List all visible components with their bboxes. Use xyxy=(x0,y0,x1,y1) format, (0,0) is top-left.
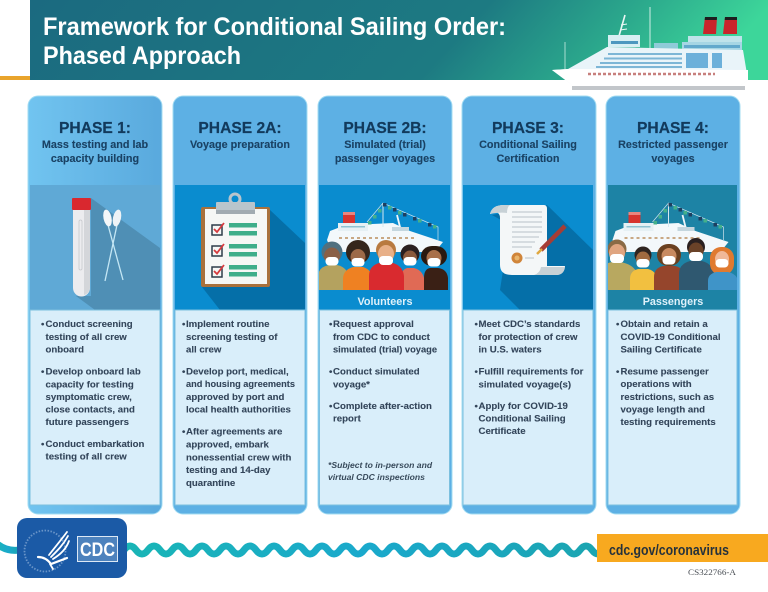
person: olive shirt xyxy=(319,242,346,290)
text panel: phase 3 actions xyxy=(463,310,593,505)
person: salmon shirt xyxy=(400,244,424,290)
url badge: cdc.gov/coronavirus xyxy=(609,543,729,559)
text panel: phase 3 actions: for protection of crew xyxy=(478,332,578,343)
illustration: volunteers and ship xyxy=(318,185,450,310)
text panel: phase 1 actions xyxy=(30,310,160,505)
text panel: phase 3 actions: in U.S. waters xyxy=(478,344,542,356)
footnote: virtual CDC inspections xyxy=(328,472,425,482)
icon: HHS eagle xyxy=(38,532,69,569)
heading: phase 4: voyages xyxy=(651,153,695,165)
text panel: phase 2B actions: simulated (trial) voyage xyxy=(333,344,438,356)
heading: phase 2A xyxy=(190,120,290,151)
heading: phase 1 xyxy=(42,120,148,165)
logo: CDC xyxy=(17,518,127,578)
text panel: phase 3 actions: • xyxy=(474,366,478,378)
text panel: phase 3 actions: Certificate xyxy=(478,426,526,437)
url badge xyxy=(597,534,768,562)
text panel: phase 3 actions: • xyxy=(474,319,478,330)
footnote: *Subject to in-person and xyxy=(328,460,433,470)
text panel: phase 4 actions: restrictions, such as xyxy=(620,392,714,403)
text panel: phase 4 actions: voyage length and xyxy=(620,404,705,416)
text panel: phase 1 actions: • xyxy=(41,366,45,378)
text panel: phase 2B actions: Complete after-action xyxy=(333,401,432,412)
heading: phase 3: PHASE 3: xyxy=(492,120,564,137)
text panel: phase 4 actions: Obtain and retain a xyxy=(620,319,708,330)
text panel: phase 4 actions: testing requirements xyxy=(620,417,716,428)
text panel: phase 2A actions: testing and 14-day xyxy=(186,465,271,476)
panel: phase 3 xyxy=(462,96,596,514)
panel: phase 2B xyxy=(318,96,452,514)
heading: phase 2A: PHASE 2A: xyxy=(198,120,282,137)
person: blue dress xyxy=(708,247,738,290)
label: volunteers: Volunteers xyxy=(358,296,412,308)
panel: phase 2A xyxy=(173,96,307,514)
illustration: passengers and ship xyxy=(601,185,738,310)
person: brown dress xyxy=(654,244,681,290)
text panel: phase 2A actions: After agreements are xyxy=(186,426,283,438)
text panel: phase 2A actions: Implement routine xyxy=(186,319,270,330)
text panel: phase 1 actions: onboard xyxy=(46,344,84,356)
person: red shirt xyxy=(369,240,404,290)
text panel: phase 2A actions: quarantine xyxy=(186,478,236,489)
heading: phase 1: capacity building xyxy=(51,153,139,165)
text panel: phase 2B actions xyxy=(320,310,450,505)
text panel: phase 3 actions: Meet CDC’s standards xyxy=(478,319,580,330)
heading: phase 3 xyxy=(479,120,577,165)
person: orange shirt xyxy=(343,240,370,290)
text panel: phase 2A actions: approved by port and xyxy=(186,392,285,403)
text panel: phase 2B actions: • xyxy=(329,319,333,330)
text panel: phase 3 actions: simulated voyage(s) xyxy=(478,380,571,390)
label: passengers: Passengers xyxy=(643,296,703,308)
illustration: test tube and swabs xyxy=(30,185,160,310)
text panel: phase 4 actions: COVID-19 Conditional xyxy=(620,332,720,343)
panel: phase 4 xyxy=(601,96,740,514)
icon: cruise ship xyxy=(552,7,748,90)
text panel: phase 2B actions: • xyxy=(329,366,333,378)
text panel: phase 3 actions: Conditional Sailing xyxy=(478,414,566,424)
text panel: phase 1 actions: testing of all crew xyxy=(46,452,127,462)
text panel: phase 2B actions: voyage* xyxy=(333,380,370,390)
text panel: phase 2B actions: report xyxy=(333,414,362,424)
heading: phase 3: Certification xyxy=(496,153,560,165)
text panel: phase 1 actions: close contacts, and xyxy=(46,404,135,416)
text panel: phase 3 actions: • xyxy=(474,401,478,412)
text panel: phase 2A actions: and housing agreements xyxy=(186,379,295,390)
text panel: phase 2A actions: local health authorities xyxy=(186,404,291,416)
heading: phase 2B: PHASE 2B: xyxy=(343,120,427,137)
text panel: phase 2B actions: • xyxy=(329,401,333,412)
text panel: phase 1 actions: Develop onboard lab xyxy=(46,366,141,378)
CDC wordmark: CDC xyxy=(80,540,115,561)
text panel: phase 2A actions: nonessential crew with xyxy=(186,452,291,464)
text panel: phase 2A actions: • xyxy=(182,366,186,378)
person: navy shirt xyxy=(679,238,714,290)
text panel: phase 1 actions: symptomatic crew, xyxy=(46,392,132,403)
heading: phase 1: PHASE 1: xyxy=(59,120,131,137)
wave divider xyxy=(0,543,604,554)
text panel: phase 2A actions: • xyxy=(182,319,186,330)
panel: phase 1 xyxy=(28,96,162,514)
text panel: phase 1 actions: capacity for testing xyxy=(46,380,134,390)
text panel: phase 2B actions: Request approval xyxy=(333,319,414,330)
text panel: phase 2A actions: Develop port, medical, xyxy=(186,366,289,378)
heading: phase 2B xyxy=(335,120,435,165)
text panel: phase 2A actions xyxy=(175,310,305,505)
text panel: phase 1 actions: Conduct embarkation xyxy=(46,439,145,450)
text panel: phase 3 actions: Apply for COVID-19 xyxy=(478,401,568,412)
heading: phase 4: Restricted passenger xyxy=(618,139,729,151)
text panel: phase 4 actions xyxy=(608,310,737,505)
heading: phase 4: PHASE 4: xyxy=(637,120,709,137)
text panel: phase 2B actions: Conduct simulated xyxy=(333,366,420,378)
text panel: phase 4 actions: Sailing Certificate xyxy=(620,344,702,356)
accent bar: orange xyxy=(0,76,30,80)
text panel: phase 2A actions: • xyxy=(182,426,186,438)
illustration: clipboard checklist xyxy=(175,185,305,310)
text panel: phase 2A actions: approved, embark xyxy=(186,440,270,450)
text panel: phase 3 actions: Fulfill requirements for xyxy=(478,366,584,378)
text panel: phase 2B actions: from CDC to conduct xyxy=(333,332,431,343)
document code: CS322766-A xyxy=(688,567,737,577)
text panel: phase 1 actions: Conduct screening xyxy=(46,319,133,330)
header banner xyxy=(30,0,768,90)
title: Phased Approach xyxy=(43,42,241,70)
heading: phase 1: Mass testing and lab xyxy=(42,139,148,151)
heading: phase 2B: Simulated (trial) xyxy=(344,139,426,151)
heading: phase 3: Conditional Sailing xyxy=(479,139,577,151)
person: yellow shirt xyxy=(630,246,657,290)
text panel: phase 2A actions: screening testing of xyxy=(186,332,278,343)
text panel: phase 4 actions: operations with xyxy=(620,379,692,390)
heading: phase 2A: Voyage preparation xyxy=(190,139,290,151)
text panel: phase 1 actions: testing of all crew xyxy=(46,332,127,343)
title: Framework for Conditional Sailing Order: xyxy=(43,13,506,41)
text panel: phase 4 actions: • xyxy=(616,366,620,378)
title xyxy=(43,13,506,70)
heading: phase 4 xyxy=(618,120,729,165)
text panel: phase 1 actions: • xyxy=(41,319,45,330)
person: dark top xyxy=(421,246,448,290)
heading: phase 2B: passenger voyages xyxy=(335,153,435,165)
text panel: phase 1 actions: • xyxy=(41,439,45,450)
text panel: phase 1 actions: future passengers xyxy=(46,417,129,428)
text panel: phase 4 actions: • xyxy=(616,319,620,330)
text panel: phase 2A actions: all crew xyxy=(186,344,222,356)
text panel: phase 4 actions: Resume passenger xyxy=(620,366,709,378)
person: olive shirt xyxy=(608,240,636,290)
illustration: certificate scroll and pen xyxy=(463,185,593,310)
